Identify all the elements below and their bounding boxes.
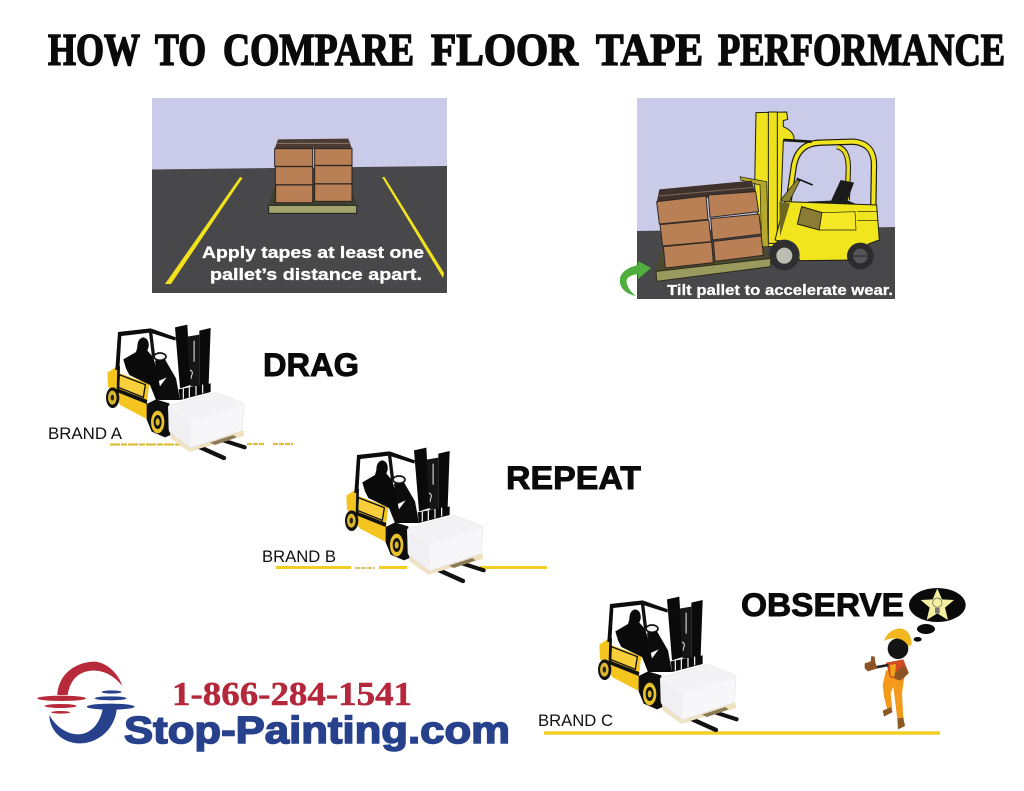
heading: drag: DRAG	[263, 347, 359, 383]
yellow forklift with tilted pallet	[655, 112, 879, 281]
panel: tilt pallet	[620, 98, 895, 299]
caption: apply tapes	[202, 243, 424, 284]
logo mark	[37, 662, 135, 743]
caption: apply tapes: Apply tapes at least one	[202, 243, 424, 262]
tape: brand C	[544, 731, 940, 735]
logo: stop-painting	[37, 662, 510, 752]
forklift: brand A	[106, 325, 245, 458]
icon: worker figure	[865, 628, 912, 729]
tape lines	[165, 177, 444, 284]
icon: green curved arrow	[620, 261, 651, 296]
torso	[886, 659, 909, 679]
pallet of boxes	[268, 139, 357, 214]
website: Stop-Painting.com	[124, 710, 510, 752]
legs	[883, 670, 905, 719]
tape: brand A	[110, 443, 293, 446]
phone number: 1-866-284-1541	[172, 676, 412, 713]
panel: apply tapes	[152, 98, 447, 293]
head	[888, 638, 908, 659]
caption: tilt pallet: Tilt pallet to accelerate wear.	[667, 283, 893, 299]
label: brand B: BRAND B	[262, 548, 336, 566]
label: brand A: BRAND A	[48, 425, 122, 443]
forklift: brand B	[345, 448, 484, 581]
heading: repeat: REPEAT	[506, 460, 641, 496]
caption: apply tapes: pallet’s distance apart.	[210, 265, 422, 284]
title: TO	[155, 25, 206, 75]
title: FLOOR	[431, 25, 578, 75]
label: brand C: BRAND C	[538, 712, 613, 730]
title: COMPARE	[223, 25, 414, 75]
title	[48, 25, 1005, 75]
boots	[883, 707, 905, 729]
tape: brand B	[276, 566, 547, 570]
hard hat	[884, 628, 912, 647]
arm and thumbs-up hand	[876, 665, 888, 667]
icon: thought bubble with light bulb	[909, 588, 966, 642]
title: TAPE	[596, 25, 703, 75]
forklift: brand C	[598, 597, 737, 730]
title: HOW	[48, 25, 140, 75]
heading: observe: OBSERVE	[741, 587, 904, 623]
